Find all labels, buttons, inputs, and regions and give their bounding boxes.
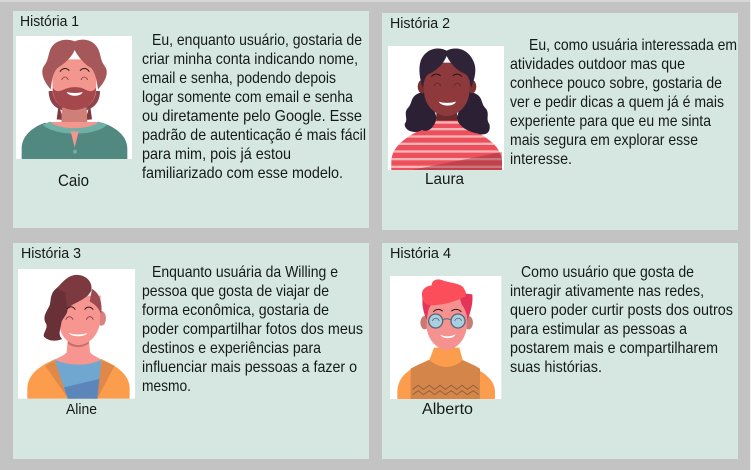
- text block: história 3: [142, 264, 363, 395]
- text block: história 4: quero poder curtir posts dos outros: [510, 302, 733, 319]
- panel: história 2: [382, 13, 738, 230]
- heading: história 3: História 3: [21, 245, 81, 262]
- text block: história 4: [510, 264, 733, 376]
- icon: avatar Alberto: [390, 276, 501, 399]
- text block: história 4: para estimular as pessoas a: [510, 321, 687, 338]
- text block: história 2: [510, 37, 737, 168]
- heading: história 1: História 1: [20, 13, 79, 30]
- text block: história 1: familiarizado com esse modelo.: [142, 165, 343, 182]
- text block: história 1: criar minha conta indicando nome,: [142, 51, 358, 68]
- text block: história 1: email e senha, podendo depois: [142, 70, 336, 87]
- text block: história 3: influenciar mais pessoas a fazer o: [142, 359, 357, 376]
- text block: história 3: pessoa que gosta de viajar de: [142, 283, 329, 300]
- text block: história 1: Eu, enquanto usuário, gostaria de: [152, 32, 362, 49]
- text block: história 2: atividades outdoor mas que: [510, 56, 685, 73]
- name: Caio: Caio: [58, 171, 89, 190]
- text block: história 3: poder compartilhar fotos dos meus: [142, 321, 363, 338]
- text block: história 2: ver e pedir dicas a quem já é mais: [510, 94, 724, 111]
- text block: história 4: interagir ativamente nas redes,: [510, 283, 704, 300]
- text block: história 2: conhece pouco sobre, gostaria de: [510, 75, 722, 92]
- icon: avatar Caio: [16, 36, 132, 159]
- text block: história 3: destinos e experiências para: [142, 340, 321, 357]
- text block: história 2: mais segura em explorar esse: [510, 132, 698, 149]
- text block: história 4: suas histórias.: [510, 359, 602, 376]
- text block: história 1: logar somente com email e senha: [142, 89, 353, 106]
- panel: história 1: [13, 11, 369, 228]
- text block: história 1: para mim, pois já estou: [142, 146, 291, 163]
- heading: história 2: História 2: [390, 15, 450, 32]
- heading: história 4: História 4: [390, 245, 451, 262]
- text block: história 2: experiente para que eu me sinta: [510, 113, 711, 130]
- name: Laura: Laura: [425, 171, 464, 188]
- text block: história 1: ou diretamente pelo Google. Esse: [142, 108, 362, 125]
- panel: história 3: [13, 243, 369, 459]
- name: Alberto: Alberto: [422, 401, 473, 418]
- text block: história 1: padrão de autenticação é mais fácil: [142, 127, 366, 144]
- text block: história 3: Enquanto usuária da Willing e: [152, 264, 338, 281]
- text block: história 4: postarem mais e compartilharem: [510, 340, 718, 357]
- panel: história 4: [382, 243, 738, 459]
- text block: história 3: forma econômica, gostaria de: [142, 302, 329, 319]
- name: Aline: Aline: [66, 401, 97, 418]
- text block: história 2: interesse.: [510, 151, 572, 168]
- icon: avatar Laura: [388, 46, 504, 170]
- text block: história 3: mesmo.: [142, 378, 191, 395]
- icon: avatar Aline: [18, 269, 135, 399]
- text block: história 4: Como usuário que gosta de: [521, 264, 694, 281]
- text block: história 1: [142, 32, 366, 182]
